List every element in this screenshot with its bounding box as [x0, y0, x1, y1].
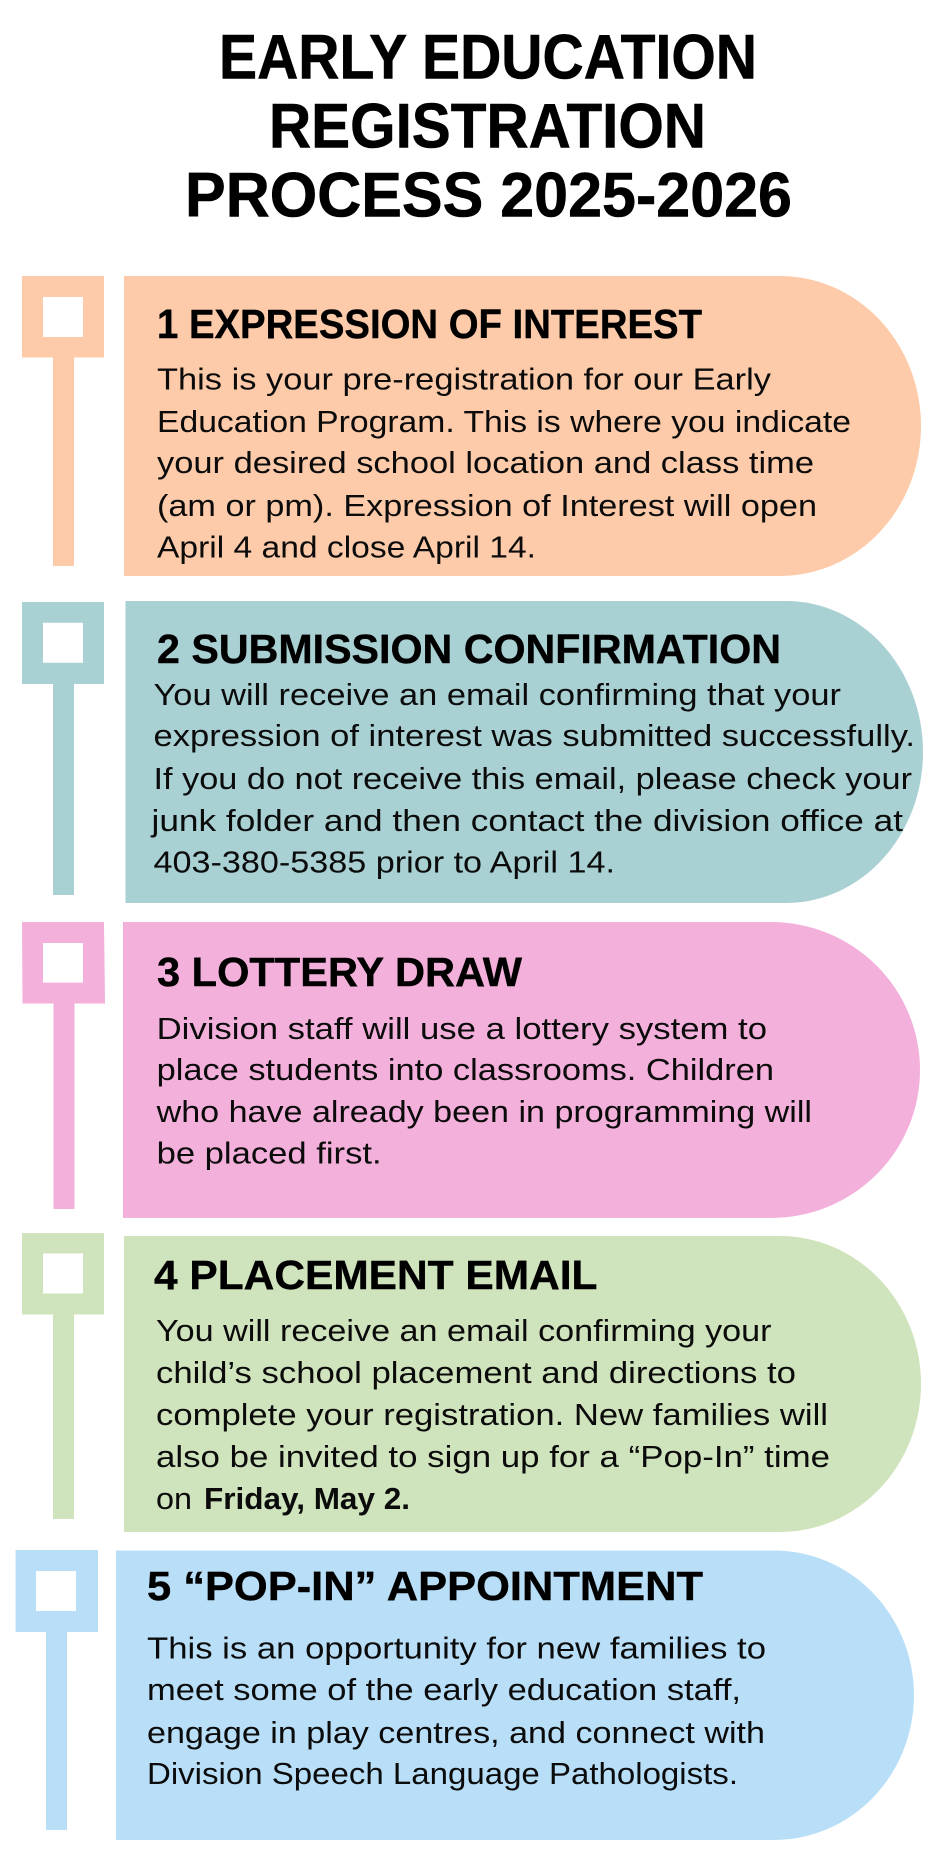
- heading: step 4: 4 PLACEMENT EMAIL: [154, 1252, 598, 1298]
- heading: step 3: 3 LOTTERY DRAW: [157, 949, 522, 995]
- text block: step 5 description: meet some of the early education staff,: [147, 1673, 741, 1707]
- text block: step 3 description: Division staff will use a lottery system to: [157, 1012, 767, 1046]
- icon: step 5 marker: [16, 1550, 98, 1830]
- panel: step 1 expression of interest: [124, 276, 921, 576]
- icon: step 2 marker: [22, 602, 104, 895]
- title: EARLY EDUCATION: [219, 22, 757, 92]
- title: [185, 22, 792, 230]
- text block: step 2 description: 403-380-5385 prior to April 14.: [154, 846, 615, 880]
- text block: step 4 description: You will receive an email confirming your: [156, 1314, 771, 1348]
- heading: step 1: 1 EXPRESSION OF INTEREST: [157, 301, 702, 347]
- heading: step 2: 2 SUBMISSION CONFIRMATION: [157, 626, 781, 672]
- text block: step 5 description: [147, 1632, 766, 1791]
- panel: step 2 submission confirmation: [126, 601, 923, 903]
- text block: step 4 description: child’s school placement and directions to: [156, 1356, 796, 1390]
- text block: step 4 description: [156, 1314, 830, 1516]
- text block: step 1 description: Education Program. This is where you indicate: [157, 405, 851, 439]
- text block: step 1 description: This is your pre-registration for our Early: [157, 362, 772, 396]
- icon: step 3 marker: [22, 922, 105, 1209]
- panel: step 5 pop-in appointment: [116, 1550, 914, 1840]
- text block: step 4 description: on: [156, 1482, 192, 1516]
- text block: step 5 description: Division Speech Language Pathologists.: [147, 1757, 738, 1791]
- text block: step 3 description: place students into classrooms. Children: [157, 1053, 774, 1087]
- text block: step 1 description: (am or pm). Expression of Interest will open: [157, 489, 817, 523]
- panel: step 3 lottery draw: [123, 922, 920, 1218]
- text block: step 1 description: [157, 362, 851, 564]
- text block: step 3 description: [155, 1012, 812, 1170]
- text block: step 4 description: Friday, May 2.: [204, 1482, 410, 1516]
- heading: step 5: 5 “POP-IN” APPOINTMENT: [147, 1563, 703, 1609]
- text block: step 1 description: April 4 and close April 14.: [157, 530, 536, 564]
- title: PROCESS 2025-2026: [185, 160, 792, 230]
- text block: step 4 description: also be invited to sign up for a “Pop-In” time: [156, 1440, 830, 1474]
- text block: step 5 description: engage in play centres, and connect with: [147, 1716, 765, 1750]
- text block: step 2 description: [150, 678, 915, 880]
- panel: step 4 placement email: [124, 1236, 921, 1532]
- title: REGISTRATION: [269, 92, 706, 162]
- text block: step 2 description: You will receive an email confirming that your: [154, 678, 841, 712]
- text block: step 2 description: expression of interest was submitted successfully.: [154, 719, 915, 753]
- text block: step 2 description: junk folder and then contact the division office at: [150, 804, 904, 838]
- icon: step 1 marker: [22, 276, 104, 566]
- text block: step 1 description: your desired school location and class time: [157, 446, 814, 480]
- text block: step 5 description: This is an opportunity for new families to: [147, 1632, 766, 1666]
- text block: step 2 description: If you do not receive this email, please check your: [154, 762, 912, 796]
- icon: step 4 marker: [22, 1233, 104, 1519]
- text block: step 3 description: be placed first.: [157, 1136, 382, 1170]
- text block: step 3 description: who have already been in programming will: [155, 1095, 812, 1129]
- text block: step 4 description: complete your registration. New families will: [156, 1398, 828, 1432]
